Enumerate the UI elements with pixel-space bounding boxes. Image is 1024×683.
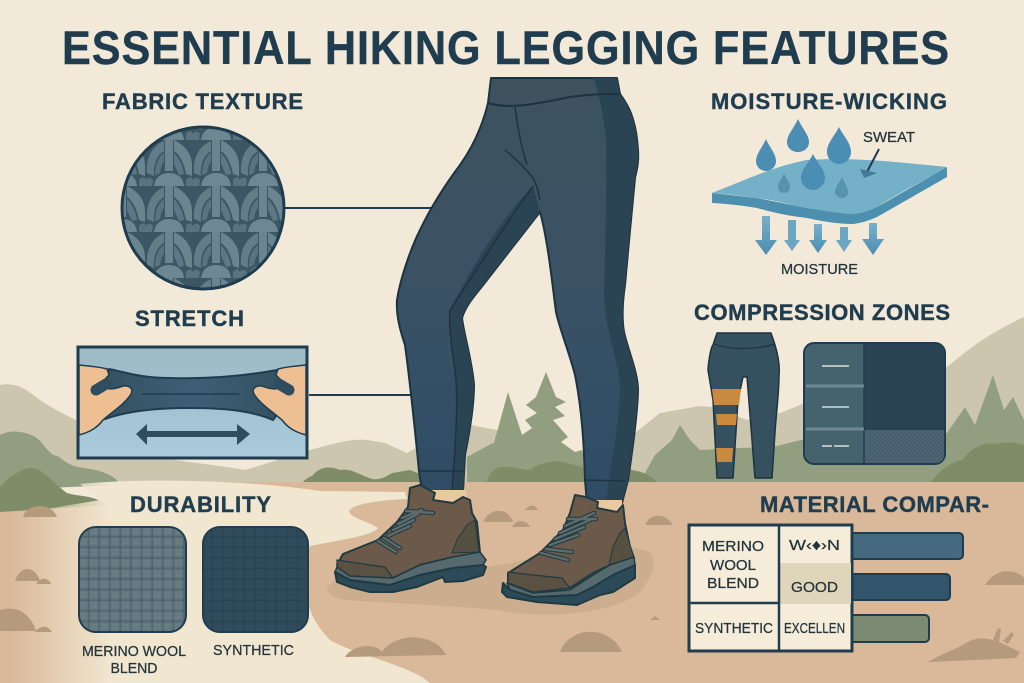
- left boot: [335, 485, 486, 592]
- left finger fold: [96, 384, 106, 390]
- heading: compression zones: COMPRESSION ZONES: [694, 300, 950, 325]
- comparison table: WOOL: [710, 557, 756, 574]
- panel: compression zones: [694, 300, 950, 478]
- fabric sheet top: [712, 159, 947, 214]
- knit texture circle: [122, 127, 284, 289]
- comparison table: GOOD: [791, 579, 838, 596]
- panel: moisture-wicking: [711, 89, 947, 278]
- swatch: synthetic: [203, 527, 308, 632]
- swatch: merino wool blend: [79, 527, 186, 632]
- fabric sheet edge: [712, 167, 947, 224]
- toe cap: [508, 572, 570, 592]
- background: dark bushes: [0, 442, 1024, 514]
- panel: durability: [79, 492, 308, 677]
- sweat drops: [756, 119, 851, 198]
- panel: fabric texture: [102, 89, 433, 289]
- comparison table: BLEND: [707, 575, 759, 592]
- double arrow: [136, 424, 250, 445]
- ankle: left sock: [430, 490, 468, 510]
- right leg side shade: [594, 78, 638, 503]
- outsole: [335, 565, 486, 592]
- heading: stretch: STRETCH: [135, 306, 244, 331]
- ground: [0, 482, 1024, 683]
- background: far hills: [0, 317, 1024, 485]
- connector line: [285, 207, 433, 209]
- comparison table: [689, 525, 852, 651]
- sweat label: SWEAT: [863, 129, 915, 146]
- bars: [840, 533, 963, 642]
- leggings: [397, 78, 638, 503]
- comparison table: SYNTHETIC: [695, 620, 773, 637]
- left leg inner shade: [450, 186, 540, 492]
- mini leggings: [708, 333, 779, 478]
- title: ESSENTIAL HIKING LEGGING FEATURES: [62, 21, 950, 74]
- right finger fold: [279, 384, 289, 390]
- moisture label: MOISTURE: [781, 261, 858, 278]
- stretched fabric: [92, 369, 293, 420]
- sweat pointer: [860, 149, 879, 178]
- label: merino wool blend: BLEND: [110, 660, 158, 677]
- right boot: [502, 495, 635, 605]
- label: merino wool blend: MERINO WOOL: [82, 643, 186, 660]
- heading: durability: DURABILITY: [130, 492, 271, 517]
- panel: material comparison: [689, 492, 989, 651]
- compression panel: [804, 343, 945, 464]
- boot shadow: [327, 548, 653, 615]
- comparison table: EXCELLEN: [784, 620, 845, 637]
- midsole: [507, 557, 635, 597]
- heel patch: [609, 528, 634, 565]
- heading: moisture-wicking: MOISTURE-WICKING: [711, 89, 947, 114]
- panel: stretch: [78, 306, 412, 458]
- left hand: [79, 365, 132, 435]
- connector line: [309, 394, 412, 396]
- rocks: [0, 506, 1024, 662]
- ankle: right sock: [585, 500, 622, 520]
- label: synthetic: SYNTHETIC: [213, 642, 294, 659]
- heel patch: [452, 520, 479, 553]
- outsole: [502, 565, 635, 605]
- heading: fabric texture: FABRIC TEXTURE: [102, 89, 303, 114]
- background: green ridge and pines: [0, 372, 1024, 490]
- trail: light path: [0, 481, 430, 683]
- comparison table: W‹♦›N: [789, 537, 840, 554]
- heading: material comparison: MATERIAL COMPAR-: [760, 492, 989, 517]
- fabric centre seam: [142, 393, 239, 395]
- comparison table: MERINO: [702, 538, 764, 555]
- laces: [541, 513, 596, 560]
- moisture arrows: [755, 216, 884, 255]
- compression bands: [712, 389, 741, 462]
- right hand: [253, 365, 306, 435]
- toe cap: [337, 560, 393, 578]
- laces: [378, 510, 433, 552]
- midsole: [335, 552, 486, 585]
- leggings seams: [420, 94, 625, 492]
- stretch illustration box: [78, 347, 307, 458]
- waistband line: [714, 344, 775, 348]
